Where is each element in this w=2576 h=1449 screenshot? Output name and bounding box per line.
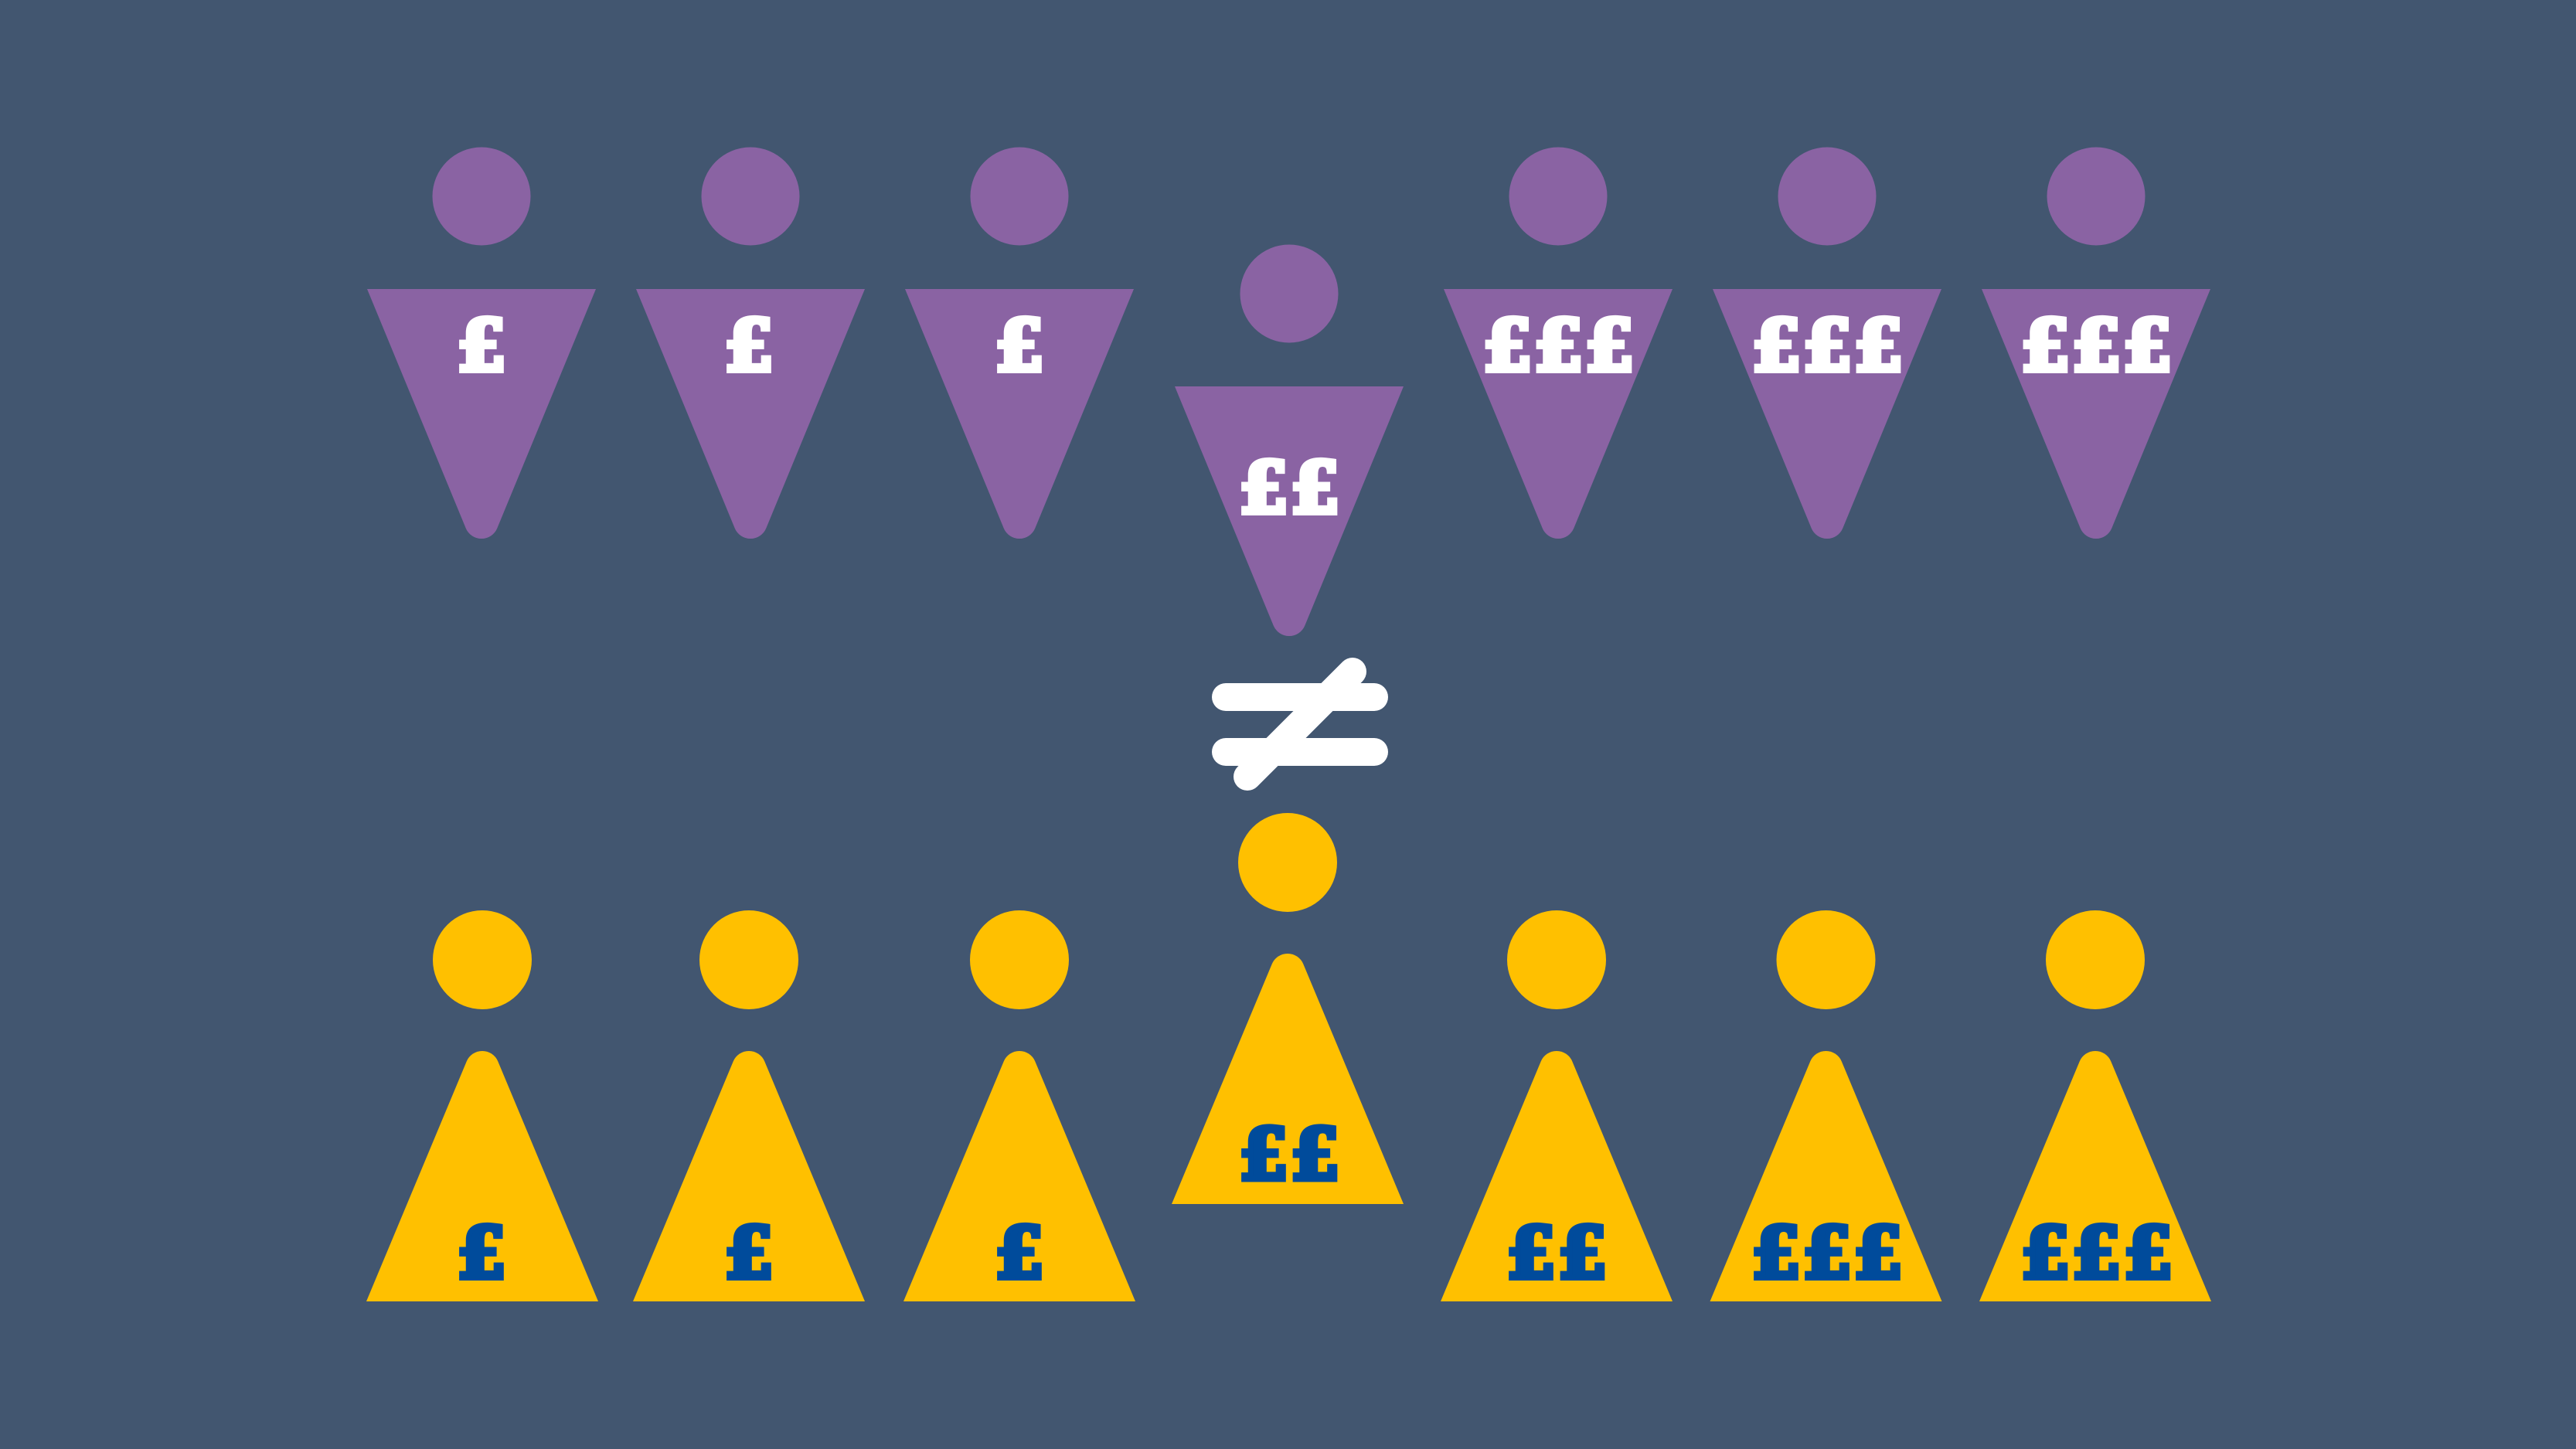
head	[1776, 910, 1875, 1009]
purple figure 5	[1444, 147, 1673, 539]
yellow figure 7	[1979, 910, 2211, 1301]
head	[702, 147, 799, 246]
pay: three pounds: £££	[1751, 304, 1904, 388]
pay: three pounds: £££	[2020, 1212, 2173, 1295]
pay: one pound: £	[457, 1212, 506, 1295]
pay: two pounds: ££	[1239, 447, 1340, 530]
head	[1507, 910, 1606, 1009]
head	[1238, 813, 1337, 912]
purple figure 1	[367, 147, 596, 539]
head	[1778, 147, 1877, 246]
yellow figure 3	[903, 910, 1135, 1301]
pay: three pounds: £££	[2020, 304, 2173, 388]
body	[1979, 1051, 2211, 1301]
pay: two pounds: ££	[1239, 1113, 1340, 1196]
pay: one pound: £	[995, 304, 1044, 388]
not-equal sign	[1226, 672, 1374, 777]
body	[367, 289, 596, 539]
body	[1441, 1051, 1673, 1301]
head	[2046, 910, 2145, 1009]
body	[903, 1051, 1135, 1301]
pay: one pound: £	[724, 304, 774, 388]
body	[1172, 954, 1404, 1204]
pay: three pounds: £££	[1751, 1212, 1903, 1295]
yellow figure 6	[1710, 910, 1941, 1301]
head	[1509, 147, 1608, 246]
pay: one pound: £	[724, 1212, 774, 1295]
pay: three pounds: £££	[1482, 304, 1635, 388]
body	[1175, 386, 1404, 636]
yellow figure 5	[1441, 910, 1673, 1301]
purple figure 2	[636, 147, 865, 539]
pay: two pounds: ££	[1506, 1212, 1608, 1295]
head	[970, 910, 1069, 1009]
purple figure 3	[905, 147, 1134, 539]
head	[2047, 147, 2146, 246]
body	[905, 289, 1134, 539]
purple figure 4 (centre)	[1175, 244, 1404, 636]
body	[636, 289, 865, 539]
head	[1240, 244, 1339, 343]
yellow figure 1	[366, 910, 598, 1301]
body	[1982, 289, 2210, 539]
top row: purple figures	[367, 147, 2210, 636]
yellow figure 4 (centre)	[1172, 813, 1404, 1204]
head	[971, 147, 1068, 246]
pay: one pound: £	[457, 304, 506, 388]
head	[433, 147, 530, 246]
head	[433, 910, 532, 1009]
bottom row: yellow figures	[366, 813, 2211, 1301]
yellow figure 2	[633, 910, 865, 1301]
body	[1713, 289, 1941, 539]
body	[1444, 289, 1673, 539]
pay: one pound: £	[995, 1212, 1044, 1295]
body	[1710, 1051, 1941, 1301]
body	[633, 1051, 865, 1301]
purple figure 6	[1713, 147, 1941, 539]
body	[366, 1051, 598, 1301]
head	[699, 910, 798, 1009]
purple figure 7	[1982, 147, 2210, 539]
